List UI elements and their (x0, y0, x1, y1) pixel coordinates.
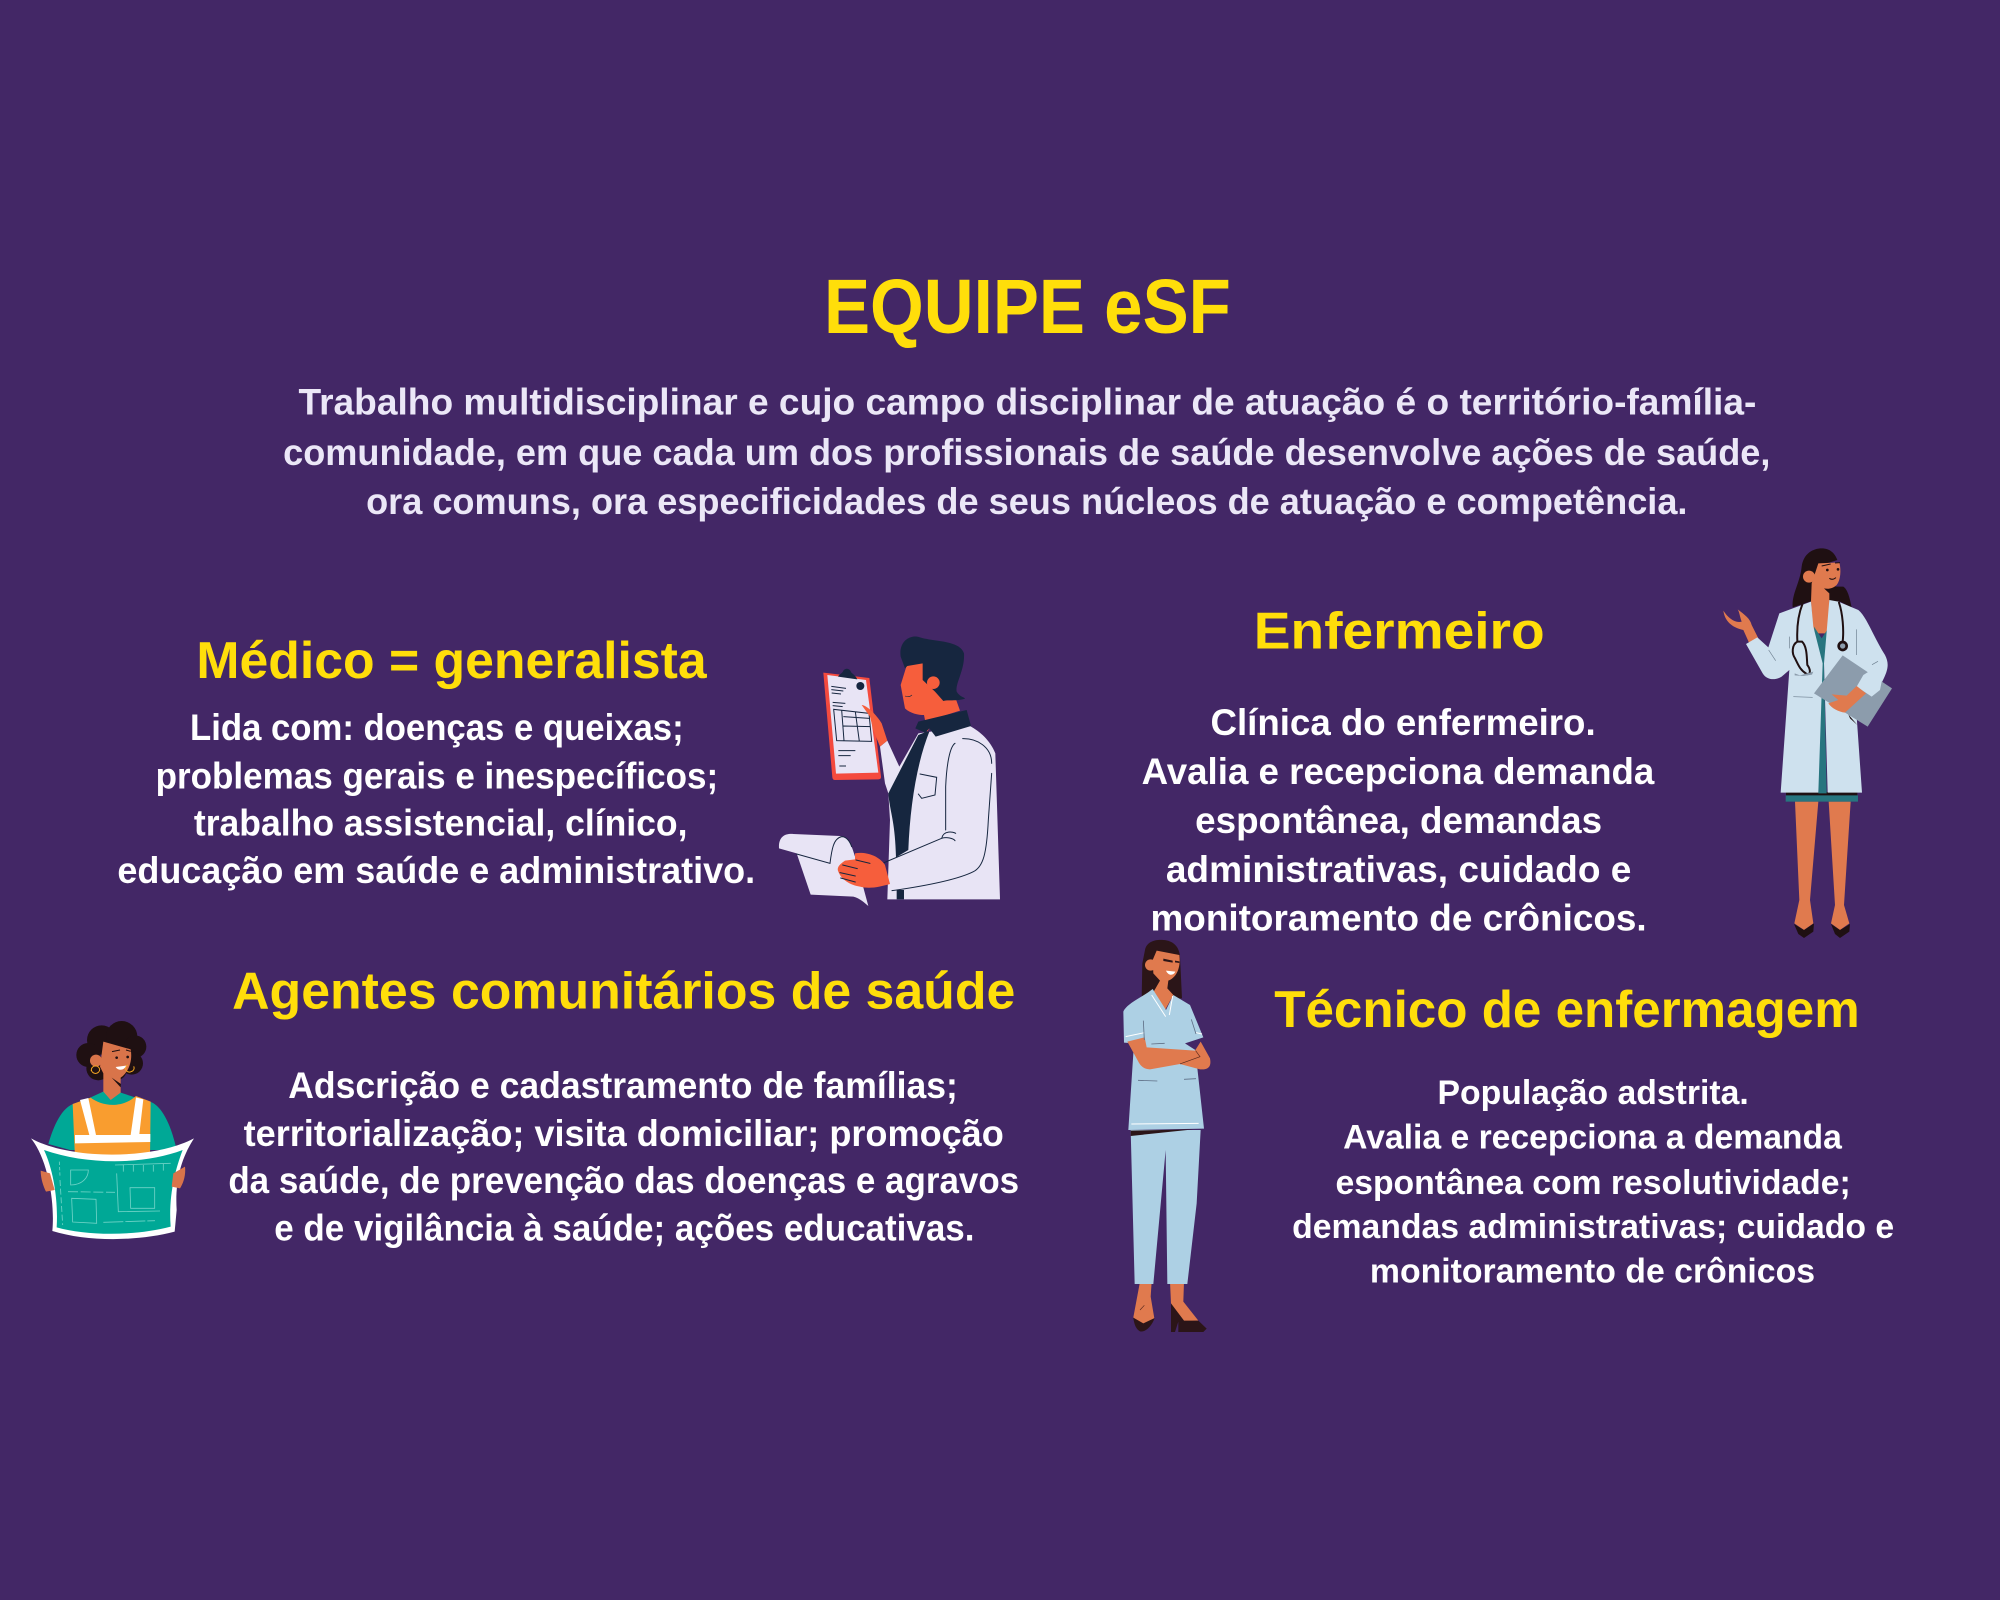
text: agentes description (228, 1065, 1019, 1249)
text: técnico description: demandas administrativas; cuidado e (1292, 1208, 1894, 1246)
text: enfermeiro description: administrativas, cuidado e (1166, 849, 1631, 890)
intro paragraph (283, 382, 1770, 522)
icon: doctor with clipboard (779, 636, 1000, 906)
heading: técnico de enfermagem: Técnico de enfermagem (1274, 981, 1860, 1039)
icon: community agent with map (31, 1021, 194, 1239)
text: médico description (117, 707, 755, 891)
heading: enfermeiro: Enfermeiro (1254, 602, 1545, 660)
panel: agentes comunitários (31, 962, 1019, 1249)
intro paragraph: comunidade, em que cada um dos profissionais de saúde desenvolve ações de saúde, (283, 432, 1770, 473)
text: médico description: trabalho assistencial, clínico, (194, 802, 687, 843)
text: agentes description: da saúde, de prevenção das doenças e agravos (228, 1160, 1019, 1201)
heading: médico: Médico = generalista (196, 632, 708, 690)
text: agentes description: territorialização; visita domiciliar; promoção (244, 1113, 1004, 1154)
text: técnico description: Avalia e recepciona a demanda (1343, 1119, 1843, 1157)
text: enfermeiro description: Clínica do enfermeiro. (1210, 702, 1596, 743)
text: enfermeiro description: Avalia e recepciona demanda (1142, 751, 1655, 792)
text: técnico description: espontânea com resolutividade; (1335, 1164, 1851, 1202)
icon: nursing technician with crossed arms (1123, 940, 1210, 1332)
text: médico description: problemas gerais e inespecíficos; (156, 755, 718, 796)
text: agentes description: Adscrição e cadastramento de famílias; (288, 1065, 958, 1106)
text: técnico description (1292, 1074, 1894, 1291)
title: EQUIPE eSF (824, 264, 1231, 350)
panel: médico (117, 632, 1000, 906)
text: médico description: educação em saúde e administrativo. (117, 850, 755, 891)
text: enfermeiro description: espontânea, demandas (1195, 800, 1602, 841)
intro paragraph: Trabalho multidisciplinar e cujo campo disciplinar de atuação é o território-família- (298, 382, 1756, 423)
text: enfermeiro description: monitoramento de crônicos. (1151, 898, 1647, 939)
text: enfermeiro description (1142, 702, 1655, 939)
icon: nurse with stethoscope (1723, 548, 1892, 938)
text: técnico description: monitoramento de crônicos (1370, 1253, 1815, 1291)
text: médico description: Lida com: doenças e queixas; (190, 707, 684, 748)
text: técnico description: População adstrita. (1437, 1074, 1749, 1112)
heading: agentes comunitários de saúde: Agentes comunitários de saúde (232, 962, 1015, 1020)
text: agentes description: e de vigilância à saúde; ações educativas. (274, 1208, 974, 1249)
intro paragraph: ora comuns, ora especificidades de seus núcleos de atuação e competência. (366, 481, 1687, 522)
panel: técnico de enfermagem (1123, 940, 1894, 1332)
panel: enfermeiro (1142, 548, 1892, 939)
